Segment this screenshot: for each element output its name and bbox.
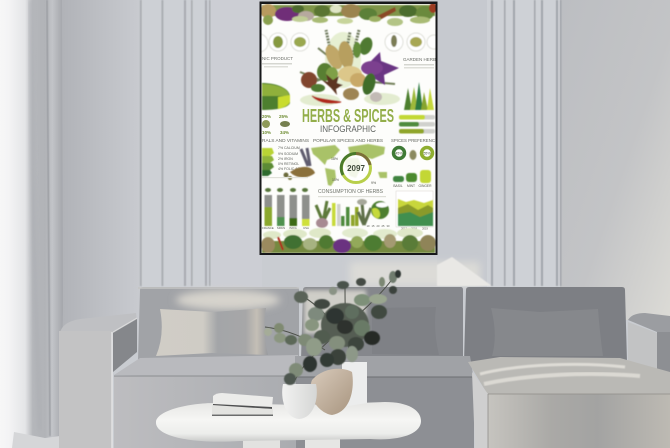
horizontal bars: [399, 115, 435, 134]
sofa: [59, 287, 670, 448]
sofa left pillow: [156, 308, 268, 356]
floor: [12, 431, 60, 448]
poster artwork: [250, 3, 441, 253]
panel: organic product pie: 34%: [280, 130, 289, 135]
panel: minerals and vitamins: [262, 138, 315, 180]
stacked layers chart: [262, 148, 274, 176]
panel: minerals and vitamins: 4% FOLIC AC: [278, 167, 300, 171]
panel: spices preference: GINGER: [418, 184, 432, 188]
panel: spices preference: [391, 138, 435, 188]
tube bars: [264, 188, 310, 226]
panel: organic product pie: 25%: [279, 114, 288, 119]
sofa middle back cushion: [301, 287, 463, 360]
panel: minerals and vitamins: RALS AND VITAMINS: [262, 138, 309, 144]
panel: organic product pie: [262, 56, 293, 135]
panel: popular spices and herbs world map: 9%: [371, 181, 376, 185]
central herb and spice bouquet: [300, 30, 400, 106]
donut charts: [394, 148, 432, 158]
herb bundle icon: [316, 201, 330, 228]
panel: vertical tube bars: INDIA: [289, 226, 297, 230]
sofa right back cushion: [464, 287, 627, 362]
title: HERBS & SPICES: [302, 106, 394, 126]
circular 2097 gauge: 2097: [347, 164, 365, 173]
panel: vertical tube bars: SPAIN: [277, 226, 285, 230]
panel: garden herbs: [399, 57, 436, 134]
herb sprig icon: [357, 199, 371, 225]
tan vase: [310, 369, 353, 415]
tall white vase: [342, 362, 367, 407]
title: [302, 109, 394, 132]
panel: spices preference: MINT: [407, 184, 415, 188]
panel: organic product pie: NIC PRODUCT: [262, 56, 293, 61]
panel: minerals and vitamins: 0% RETINOL: [278, 162, 299, 166]
panel: consumption of herbs: 25: [382, 224, 385, 228]
top herb garland: [260, 3, 437, 26]
sofa left seat: [114, 355, 305, 448]
poster paper: [262, 4, 436, 253]
panel: minerals and vitamins: 2% IRON: [278, 157, 293, 161]
panel: garden herbs: GARDEN HERB: [403, 57, 436, 62]
bottom herb garland: [261, 228, 436, 253]
poster frame: [260, 2, 438, 255]
panel: consumption of herbs: CONSUMPTION OF HERBS: [318, 189, 384, 195]
coffee table: [156, 402, 421, 448]
herb icon circles: [250, 33, 441, 52]
wall moulding left: [140, 0, 210, 286]
pie chart: [262, 83, 290, 110]
panel: vertical tube bars: FRANCE: [262, 226, 274, 230]
sofa left arm: [59, 313, 137, 448]
curtain: [0, 0, 63, 448]
panel: spices preference: SPICES PREFERENC: [391, 138, 435, 144]
framed poster: [250, 2, 441, 255]
panel: consumption of herbs: 30: [387, 224, 390, 228]
panel: spices preference: 55%: [423, 152, 431, 156]
subtitle: INFOGRAPHIC: [320, 124, 376, 134]
wall moulding right: [491, 0, 562, 286]
eucalyptus plant: [264, 270, 401, 385]
panel: popular spices and herbs world map: 18%: [331, 157, 338, 161]
panel: area chart: [396, 191, 433, 230]
panel: popular spices and herbs world map: [311, 138, 387, 186]
panel: consumption of herbs: 20: [377, 224, 380, 228]
books: [212, 393, 273, 416]
jar icons: [393, 170, 431, 183]
herb bundle and mortar icon: [284, 148, 315, 180]
panel: vertical tube bars: [262, 177, 310, 230]
panel: spices preference: 45%: [395, 152, 403, 156]
sofa right pillow: [491, 308, 603, 356]
sofa right arm: [628, 313, 670, 372]
green pie blob: [371, 201, 389, 219]
panel: vertical tube bars: USA: [303, 226, 309, 230]
sofa chaise: [468, 357, 670, 448]
sofa left back cushion: [138, 287, 299, 360]
sofa middle pillow: [372, 307, 439, 355]
panel: minerals and vitamins: 9% SODIUM: [278, 152, 298, 156]
world map: [311, 144, 387, 186]
panel: area chart: 2019: [422, 226, 428, 230]
panel: spices preference: BASIL: [393, 184, 403, 188]
panel: consumption of herbs: 10: [367, 224, 370, 228]
panel: organic product pie: 10%: [262, 130, 271, 135]
panel: consumption of herbs: 15: [372, 224, 375, 228]
white round vase: [282, 384, 317, 419]
panel: minerals and vitamins: 7% CALCIUM: [278, 146, 300, 150]
panel: area chart: 2017: [401, 226, 407, 230]
panel: popular spices and herbs world map: 10%: [332, 178, 339, 182]
sofa middle seat: [295, 356, 474, 448]
panel: consumption of herbs: [316, 189, 390, 228]
panel: organic product pie: 20%: [262, 114, 271, 119]
panel: popular spices and herbs world map: POPULAR SPICES AND HERBS: [313, 138, 383, 144]
triangle chart: [404, 82, 434, 110]
panel: area chart: 2018: [411, 226, 417, 230]
consumption bar chart: [332, 203, 358, 226]
